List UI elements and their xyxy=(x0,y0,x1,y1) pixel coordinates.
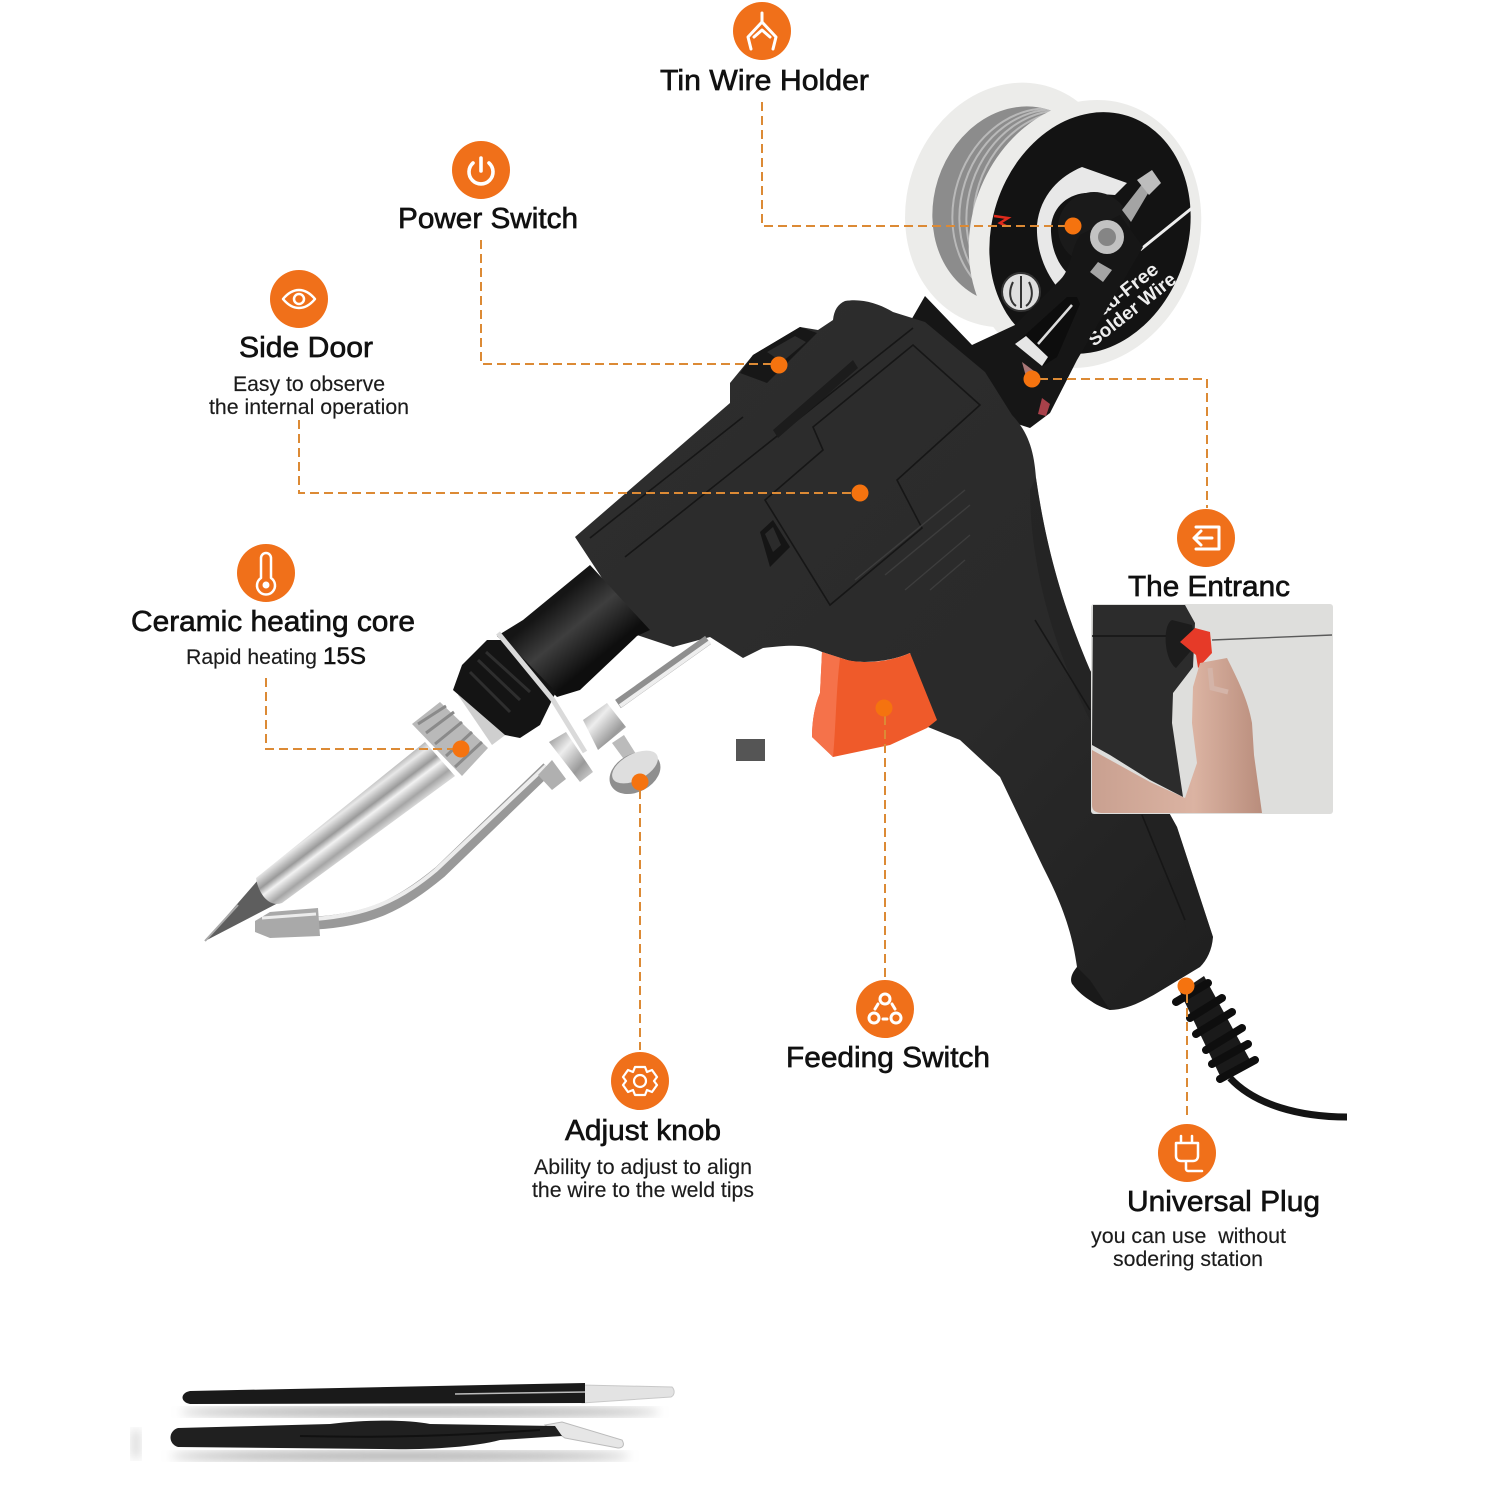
solder wire spool xyxy=(905,82,1202,368)
wire feed tube xyxy=(255,640,710,938)
callout: side door: Easy to observe xyxy=(233,373,385,396)
callout: power switch xyxy=(398,141,578,235)
callout: the entrance xyxy=(1128,509,1290,603)
trigger xyxy=(812,652,937,757)
callout: tin wire holder xyxy=(660,2,869,97)
leader lines xyxy=(266,102,1207,1115)
spool bracket arm xyxy=(910,170,1161,428)
callout: ceramic heating core: Ceramic heating core xyxy=(131,606,415,638)
callout: ceramic heating core: 15S xyxy=(323,643,366,670)
photo: threading solder wire into the entrance xyxy=(1091,604,1333,814)
callout: side door xyxy=(209,270,409,419)
grip strain relief and cord xyxy=(1176,976,1347,1117)
callout: ceramic heating core xyxy=(131,544,415,670)
solder wire spool: Solder Wire xyxy=(1084,269,1181,351)
callout: the entrance: The Entranc xyxy=(1128,571,1290,603)
callout: side door: Side Door xyxy=(239,332,373,364)
callout: universal plug: Universal Plug xyxy=(1127,1186,1320,1218)
heating core tip xyxy=(205,685,512,941)
callout: adjust knob xyxy=(532,1052,754,1202)
soldering gun body xyxy=(575,300,1213,1010)
callout: universal plug xyxy=(1091,1124,1320,1271)
callout: universal plug: sodering station xyxy=(1113,1248,1263,1271)
callout: adjust knob: Adjust knob xyxy=(565,1115,721,1147)
barrel and ribbed nut xyxy=(453,565,650,752)
grey square mark xyxy=(736,739,765,761)
callout dots xyxy=(452,218,1194,994)
callout: ceramic heating core: Rapid heating xyxy=(186,646,317,669)
callout: feeding switch xyxy=(786,980,990,1074)
callout: universal plug: you can use without xyxy=(1091,1225,1286,1248)
callout: power switch: Power Switch xyxy=(398,203,578,235)
solder wire spool: ad-Free xyxy=(1093,259,1163,320)
callout: tin wire holder: Tin Wire Holder xyxy=(660,65,869,97)
callout: adjust knob: Ability to adjust to align xyxy=(534,1156,752,1179)
tweezers xyxy=(131,1383,674,1461)
callout: side door: the internal operation xyxy=(209,396,409,419)
callout: feeding switch: Feeding Switch xyxy=(786,1042,990,1074)
callout: adjust knob: the wire to the weld tips xyxy=(532,1179,754,1202)
